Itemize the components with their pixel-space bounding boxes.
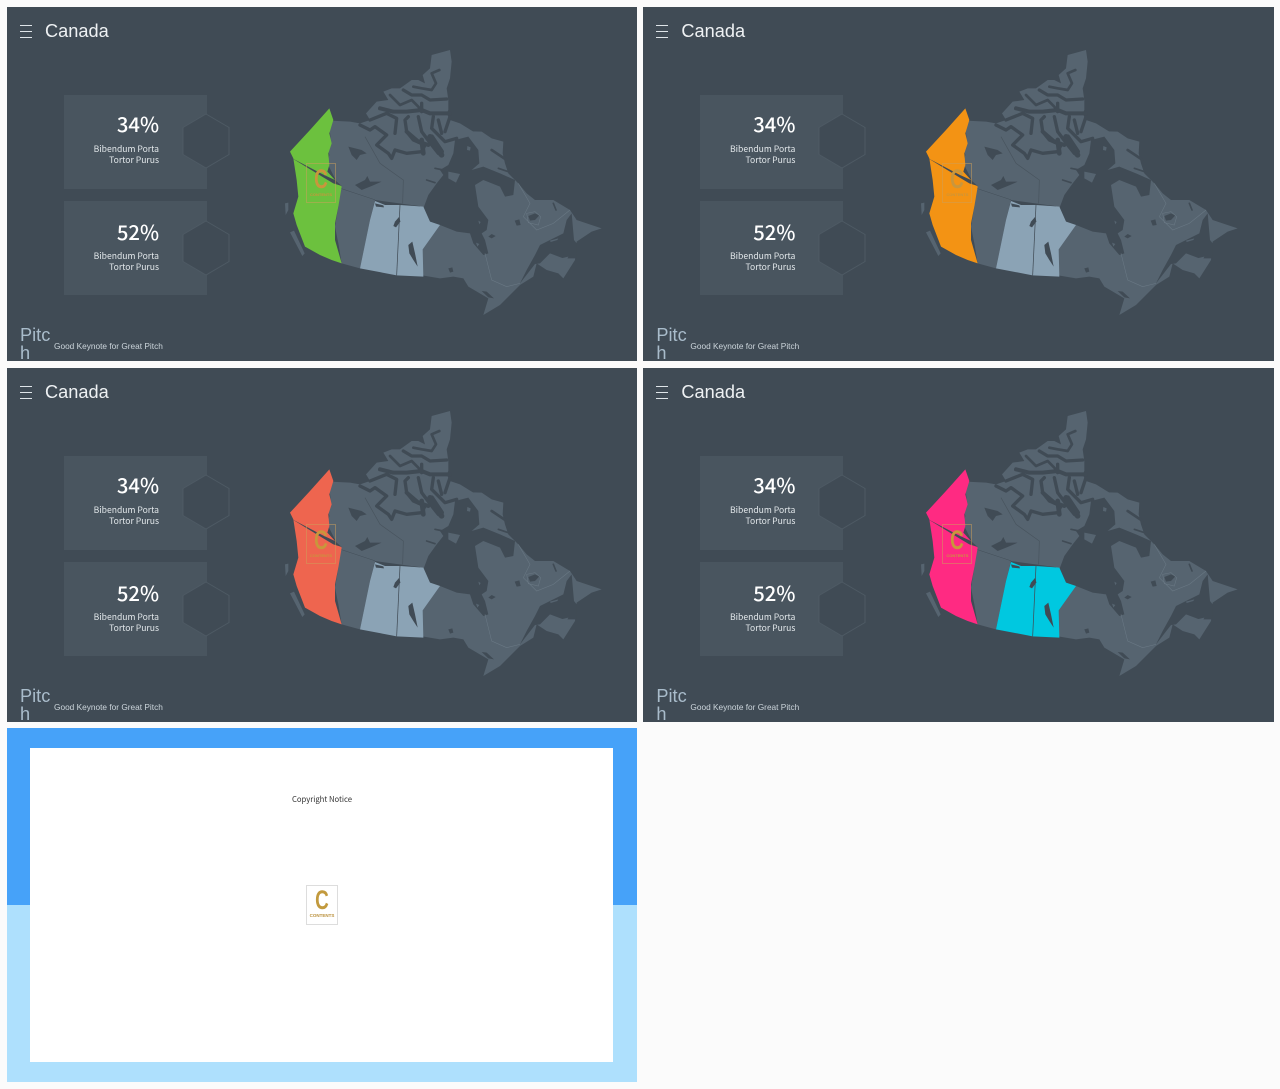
icon: hexagon <box>184 222 230 275</box>
icon: menu <box>656 25 668 38</box>
label: stat one: Tortor Purus <box>746 154 795 166</box>
card: 34 percent <box>700 456 843 550</box>
label: stat two: Tortor Purus <box>109 622 159 634</box>
stat: 52 percent: 52% <box>753 577 795 607</box>
logo: CONTENTS <box>946 192 968 197</box>
stat: 52 percent: 52% <box>753 216 795 246</box>
logo: C <box>951 525 964 555</box>
label: stat two <box>94 611 159 634</box>
icon: hexagon <box>820 476 866 529</box>
label: stat one: Tortor Purus <box>109 514 159 526</box>
label: stat one: Tortor Purus <box>746 514 795 526</box>
label: stat two <box>94 250 159 272</box>
stat: 34 percent: 34% <box>753 469 795 499</box>
logo <box>942 163 972 203</box>
card: 34 percent <box>64 456 207 550</box>
label: stat two: Tortor Purus <box>746 260 795 272</box>
icon: hexagon <box>184 476 230 529</box>
stat: 52 percent: 52% <box>117 216 159 246</box>
label: stat one: Bibendum Porta <box>730 504 795 516</box>
icon: hexagon <box>184 114 230 168</box>
stat: 34 percent: 34% <box>753 108 795 138</box>
logo: CONTENTS <box>946 553 968 558</box>
icon: menu <box>656 386 668 399</box>
stat: 34 percent: 34% <box>117 469 159 499</box>
label: stat two: Tortor Purus <box>746 622 795 634</box>
tagline: Good Keynote for Great Pitch <box>690 341 799 351</box>
white sheet <box>30 748 613 1062</box>
label: stat one <box>730 143 796 166</box>
heading: Copyright Notice: Copyright Notice <box>292 794 352 805</box>
label: stat one: Bibendum Porta <box>94 143 159 155</box>
logo <box>306 524 336 564</box>
logo: C <box>951 164 964 194</box>
logo <box>306 885 338 925</box>
tagline: Good Keynote for Great Pitch <box>690 702 799 712</box>
card: 34 percent <box>64 95 207 189</box>
icon: menu <box>20 386 32 399</box>
panel: Canada slide, green <box>7 7 637 361</box>
card: 52 percent <box>64 201 207 295</box>
panel: Canada slide, coral <box>7 368 637 722</box>
logo: C <box>314 164 328 194</box>
panel: Canada slide, orange <box>643 7 1274 361</box>
heading: Canada: Canada <box>45 382 109 402</box>
card: 52 percent <box>700 201 843 295</box>
label: stat two <box>730 611 796 634</box>
label: stat two: Bibendum Porta <box>730 611 795 623</box>
label: stat one: Bibendum Porta <box>730 143 795 155</box>
logo: C <box>314 525 328 555</box>
logo: CONTENTS <box>310 192 332 197</box>
label: stat two: Bibendum Porta <box>94 611 159 623</box>
icon: hexagon <box>184 582 230 636</box>
heading: Canada: Canada <box>681 382 745 402</box>
logo: C <box>315 885 329 915</box>
logo: CONTENTS <box>310 913 334 918</box>
icon: menu <box>20 25 32 38</box>
icon: hexagon <box>820 582 866 636</box>
stat: 52 percent: 52% <box>117 577 159 607</box>
label: stat one: Bibendum Porta <box>94 504 159 516</box>
map of Canada <box>285 50 602 315</box>
label: stat two: Tortor Purus <box>109 260 159 272</box>
logo: CONTENTS <box>310 553 332 558</box>
heading: Canada: Canada <box>45 21 109 41</box>
label: stat one: Tortor Purus <box>109 154 159 166</box>
tagline: Good Keynote for Great Pitch <box>54 702 163 712</box>
panel: copyright notice <box>7 728 637 1082</box>
logo <box>942 524 972 564</box>
heading: Canada: Canada <box>681 21 745 41</box>
map of Canada <box>921 411 1238 676</box>
label: stat two: Bibendum Porta <box>94 250 159 262</box>
label: stat one <box>730 504 796 526</box>
icon: hexagon <box>820 222 866 275</box>
map of Canada <box>285 411 602 676</box>
panel: Canada slide, pink and cyan <box>643 368 1274 722</box>
stat: 34 percent: 34% <box>117 108 159 138</box>
icon: hexagon <box>820 114 866 168</box>
label: stat one <box>94 504 159 526</box>
card: 34 percent <box>700 95 843 189</box>
card: 52 percent <box>64 562 207 656</box>
tagline: Good Keynote for Great Pitch <box>54 341 163 351</box>
logo <box>306 163 336 203</box>
map of Canada <box>921 50 1238 315</box>
label: stat two: Bibendum Porta <box>730 250 795 262</box>
card: 52 percent <box>700 562 843 656</box>
label: stat one <box>94 143 159 166</box>
label: stat two <box>730 250 796 272</box>
